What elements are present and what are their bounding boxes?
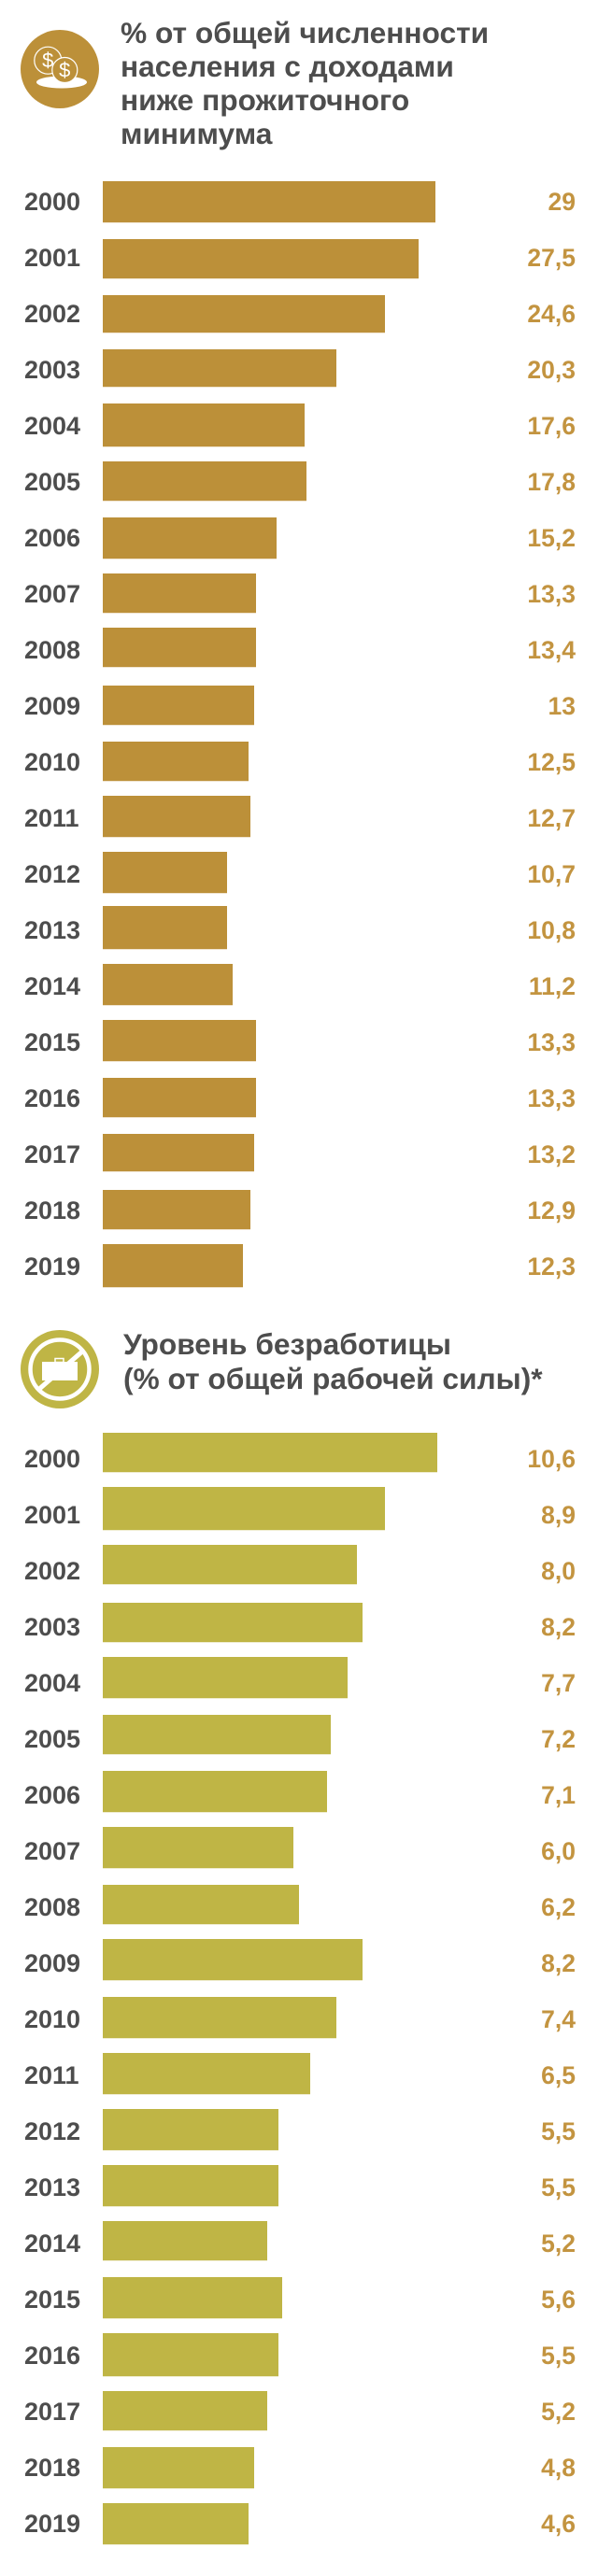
row 2013: 5,5 (541, 2173, 576, 2201)
row 2011 (24, 796, 576, 838)
row 2009: 8,2 (541, 1949, 576, 1977)
row 2010 (24, 1997, 576, 2039)
row 2011: 2011 (24, 804, 79, 832)
row 2009 (24, 1939, 576, 1981)
row 2015: 2015 (24, 1028, 80, 1056)
row 2015: 5,6 (541, 2286, 576, 2314)
row 2009: 2009 (24, 692, 80, 720)
row 2004: 2004 (24, 412, 80, 440)
row 2006: 2006 (24, 524, 80, 552)
heading: unemployment: (% от общей рабочей силы)* (123, 1362, 543, 1395)
row 2005 (24, 1715, 576, 1755)
row 2016 (0, 2328, 598, 2384)
row 2003: 8,2 (541, 1613, 576, 1641)
row 2004 (24, 403, 576, 447)
row 2005 (24, 461, 576, 502)
row 2008: 2008 (24, 1893, 80, 1921)
row 2017: 2017 (24, 2398, 80, 2426)
row 2002 (24, 1545, 576, 1585)
row 2011: 12,7 (527, 804, 576, 832)
row 2012: 5,5 (541, 2117, 576, 2145)
row 2006 (24, 517, 576, 559)
heading: poverty share (121, 16, 489, 150)
row 2012: 2012 (24, 2117, 80, 2145)
row 2019: 12,3 (527, 1253, 576, 1281)
row 2002: 24,6 (527, 300, 576, 328)
panel: population below subsistence minimum (21, 16, 576, 1288)
row 2001: 8,9 (541, 1501, 576, 1529)
row 2005: 2005 (24, 468, 80, 496)
row 2014: 2014 (24, 972, 80, 1000)
row 2003: 2003 (24, 1613, 80, 1641)
row 2017: 13,2 (527, 1140, 576, 1168)
row 2010: 12,5 (527, 748, 576, 776)
row 2014 (24, 2221, 576, 2261)
row 2000: 29 (548, 188, 576, 216)
icon: coins (21, 30, 99, 108)
row 2001 (24, 1487, 576, 1531)
row 2013: 10,8 (527, 916, 576, 944)
row 2000: 10,6 (527, 1445, 576, 1473)
row 2000 (24, 181, 576, 223)
row 2008 (24, 1885, 576, 1925)
heading: unemployment: Уровень безработицы (123, 1327, 451, 1361)
row 2018: 12,9 (527, 1196, 576, 1224)
row 2018 (24, 1190, 576, 1230)
row 2004 (24, 1657, 576, 1699)
row 2018 (0, 2440, 598, 2496)
row 2013: 2013 (24, 2173, 80, 2201)
row 2015 (0, 2272, 598, 2328)
row 2010: 2010 (24, 748, 80, 776)
row 2015 (24, 1020, 576, 1062)
row 2008 (24, 628, 576, 668)
row 2017 (0, 2384, 598, 2440)
row 2008: 6,2 (541, 1893, 576, 1921)
row 2009 (24, 686, 576, 726)
row 2015: 2015 (24, 2286, 80, 2314)
row 2016 (24, 1078, 576, 1118)
row 2002 (24, 295, 576, 333)
row 2006: 2006 (24, 1781, 80, 1809)
row 2014: 2014 (24, 2229, 80, 2258)
row 2003 (24, 1603, 576, 1643)
row 2002: 8,0 (541, 1557, 576, 1585)
row 2002: 2002 (24, 300, 80, 328)
row 2017 (24, 1134, 576, 1172)
row 2009: 13 (548, 692, 576, 720)
row 2010: 7,4 (541, 2005, 576, 2033)
row 2008: 13,4 (527, 636, 576, 664)
row 2000 (24, 1433, 576, 1473)
row 2019: 4,6 (541, 2510, 576, 2538)
row 2014: 5,2 (541, 2229, 576, 2258)
row 2016: 2016 (24, 2342, 80, 2370)
row 2007: 13,3 (527, 580, 576, 608)
row 2014 (24, 964, 576, 1006)
row 2007: 6,0 (541, 1837, 576, 1865)
row 2012 (24, 852, 576, 894)
row 2002: 2002 (24, 1557, 80, 1585)
row 2018: 2018 (24, 2454, 80, 2482)
row 2006: 15,2 (527, 524, 576, 552)
row 2012: 10,7 (527, 860, 576, 888)
row 2003 (24, 349, 576, 388)
row 2007: 2007 (24, 580, 80, 608)
row 2019: 2019 (24, 2510, 80, 2538)
row 2005: 2005 (24, 1725, 80, 1753)
row 2019 (24, 1244, 576, 1288)
icon: coins: $ (42, 49, 53, 72)
row 2017: 5,2 (541, 2398, 576, 2426)
row 2001: 2001 (24, 244, 80, 272)
row 2006 (24, 1771, 576, 1813)
row 2000: 2000 (24, 188, 80, 216)
row 2001 (24, 239, 576, 279)
row 2009: 2009 (24, 1949, 80, 1977)
heading: poverty share: % от общей численности (121, 16, 489, 50)
row 2004: 2004 (24, 1669, 80, 1697)
row 2012: 2012 (24, 860, 80, 888)
row 2010 (24, 742, 576, 782)
row 2003: 2003 (24, 356, 80, 384)
row 2000: 2000 (24, 1445, 80, 1473)
row 2001: 2001 (24, 1501, 80, 1529)
row 2006: 7,1 (541, 1781, 576, 1809)
row 2007 (24, 1827, 576, 1869)
row 2016: 13,3 (527, 1084, 576, 1112)
icon: crossed-out briefcase (21, 1330, 99, 1408)
row 2003: 20,3 (527, 356, 576, 384)
row 2016: 2016 (24, 1084, 80, 1112)
row 2018: 4,8 (541, 2454, 576, 2482)
row 2011: 6,5 (541, 2061, 576, 2089)
row 2016: 5,5 (541, 2342, 576, 2370)
row 2013 (24, 906, 576, 950)
row 2018: 2018 (24, 1196, 80, 1224)
row 2013: 2013 (24, 916, 80, 944)
icon: coins: $ (59, 58, 70, 82)
heading: poverty share: минимума (121, 117, 272, 150)
heading: poverty share: населения с доходами (121, 50, 454, 83)
row 2005: 17,8 (527, 468, 576, 496)
heading: unemployment (123, 1327, 543, 1395)
row 2001: 27,5 (527, 244, 576, 272)
row 2004: 7,7 (541, 1669, 576, 1697)
row 2012 (24, 2109, 576, 2151)
row 2011: 2011 (24, 2061, 79, 2089)
row 2014: 11,2 (529, 972, 576, 1000)
row 2005: 7,2 (541, 1725, 576, 1753)
heading: poverty share: ниже прожиточного (121, 83, 409, 117)
row 2015: 13,3 (527, 1028, 576, 1056)
row 2007 (24, 573, 576, 614)
row 2011 (24, 2053, 576, 2095)
row 2013 (24, 2165, 576, 2207)
row 2010: 2010 (24, 2005, 80, 2033)
row 2008: 2008 (24, 636, 80, 664)
row 2019 (0, 2496, 598, 2552)
row 2017: 2017 (24, 1140, 80, 1168)
row 2004: 17,6 (527, 412, 576, 440)
row 2019: 2019 (24, 1253, 80, 1281)
row 2007: 2007 (24, 1837, 80, 1865)
